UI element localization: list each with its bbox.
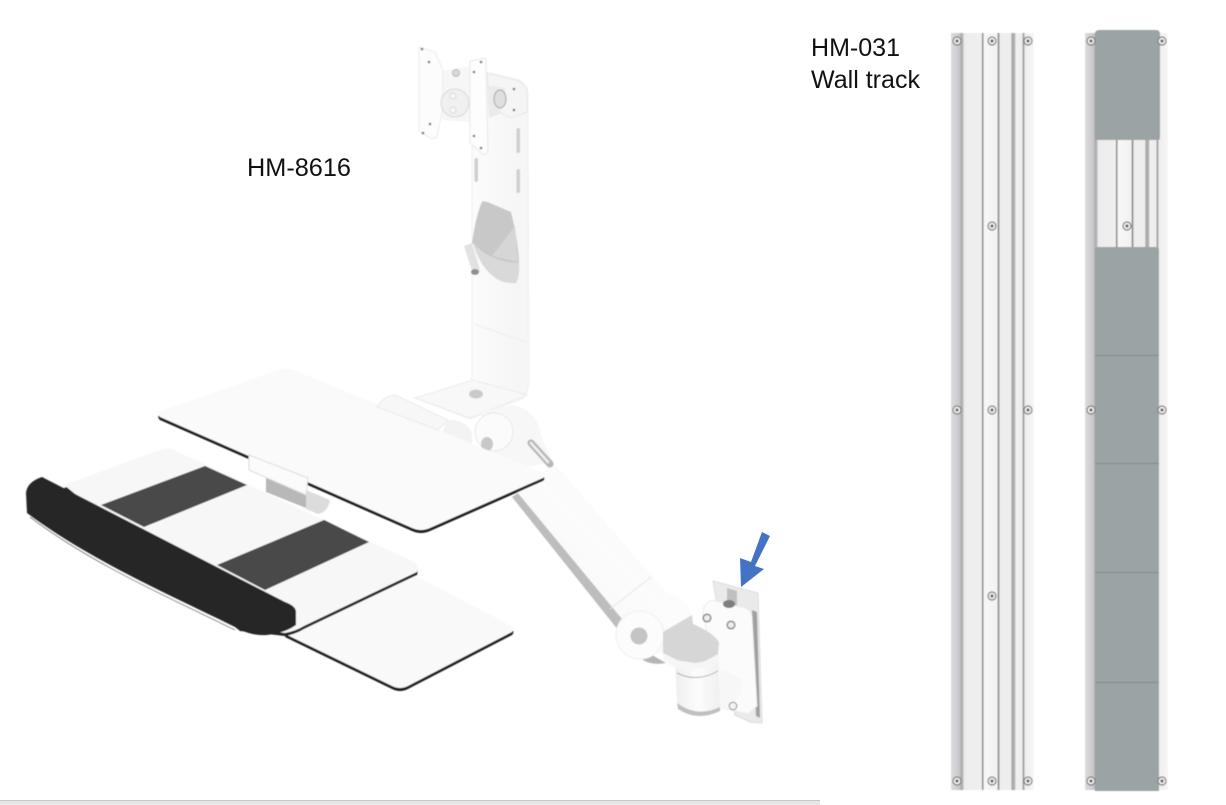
palm rest [26,477,296,635]
label: HM-031 Wall track: Wall track [811,66,920,94]
keyboard pad, upper [101,466,247,527]
front tray clamp [249,455,308,495]
keyboard pad, lower [217,520,369,590]
hinge assembly [377,380,553,472]
product: wall track with covers [1085,30,1168,791]
tray support bracket [266,478,330,514]
product: wall track, front view [951,33,1034,790]
articulating arm [512,462,692,664]
label: HM-031 Wall track: HM-031 [811,34,900,62]
monitor VESA bracket [419,47,527,155]
wall mount plate [703,581,762,723]
storage pocket [464,201,519,283]
upper work surface [158,368,550,533]
monitor post [415,73,529,419]
product: HM-8616 sit-stand arm [26,47,762,723]
lower sliding tray [285,574,514,691]
swivel barrel [663,615,742,716]
keyboard tray [26,448,418,636]
bottom scrollbar strip [0,800,820,805]
cover panels [1095,30,1160,791]
arrow: blue pointer to wall mount [740,532,770,587]
label: HM-8616: HM-8616 [247,154,351,182]
